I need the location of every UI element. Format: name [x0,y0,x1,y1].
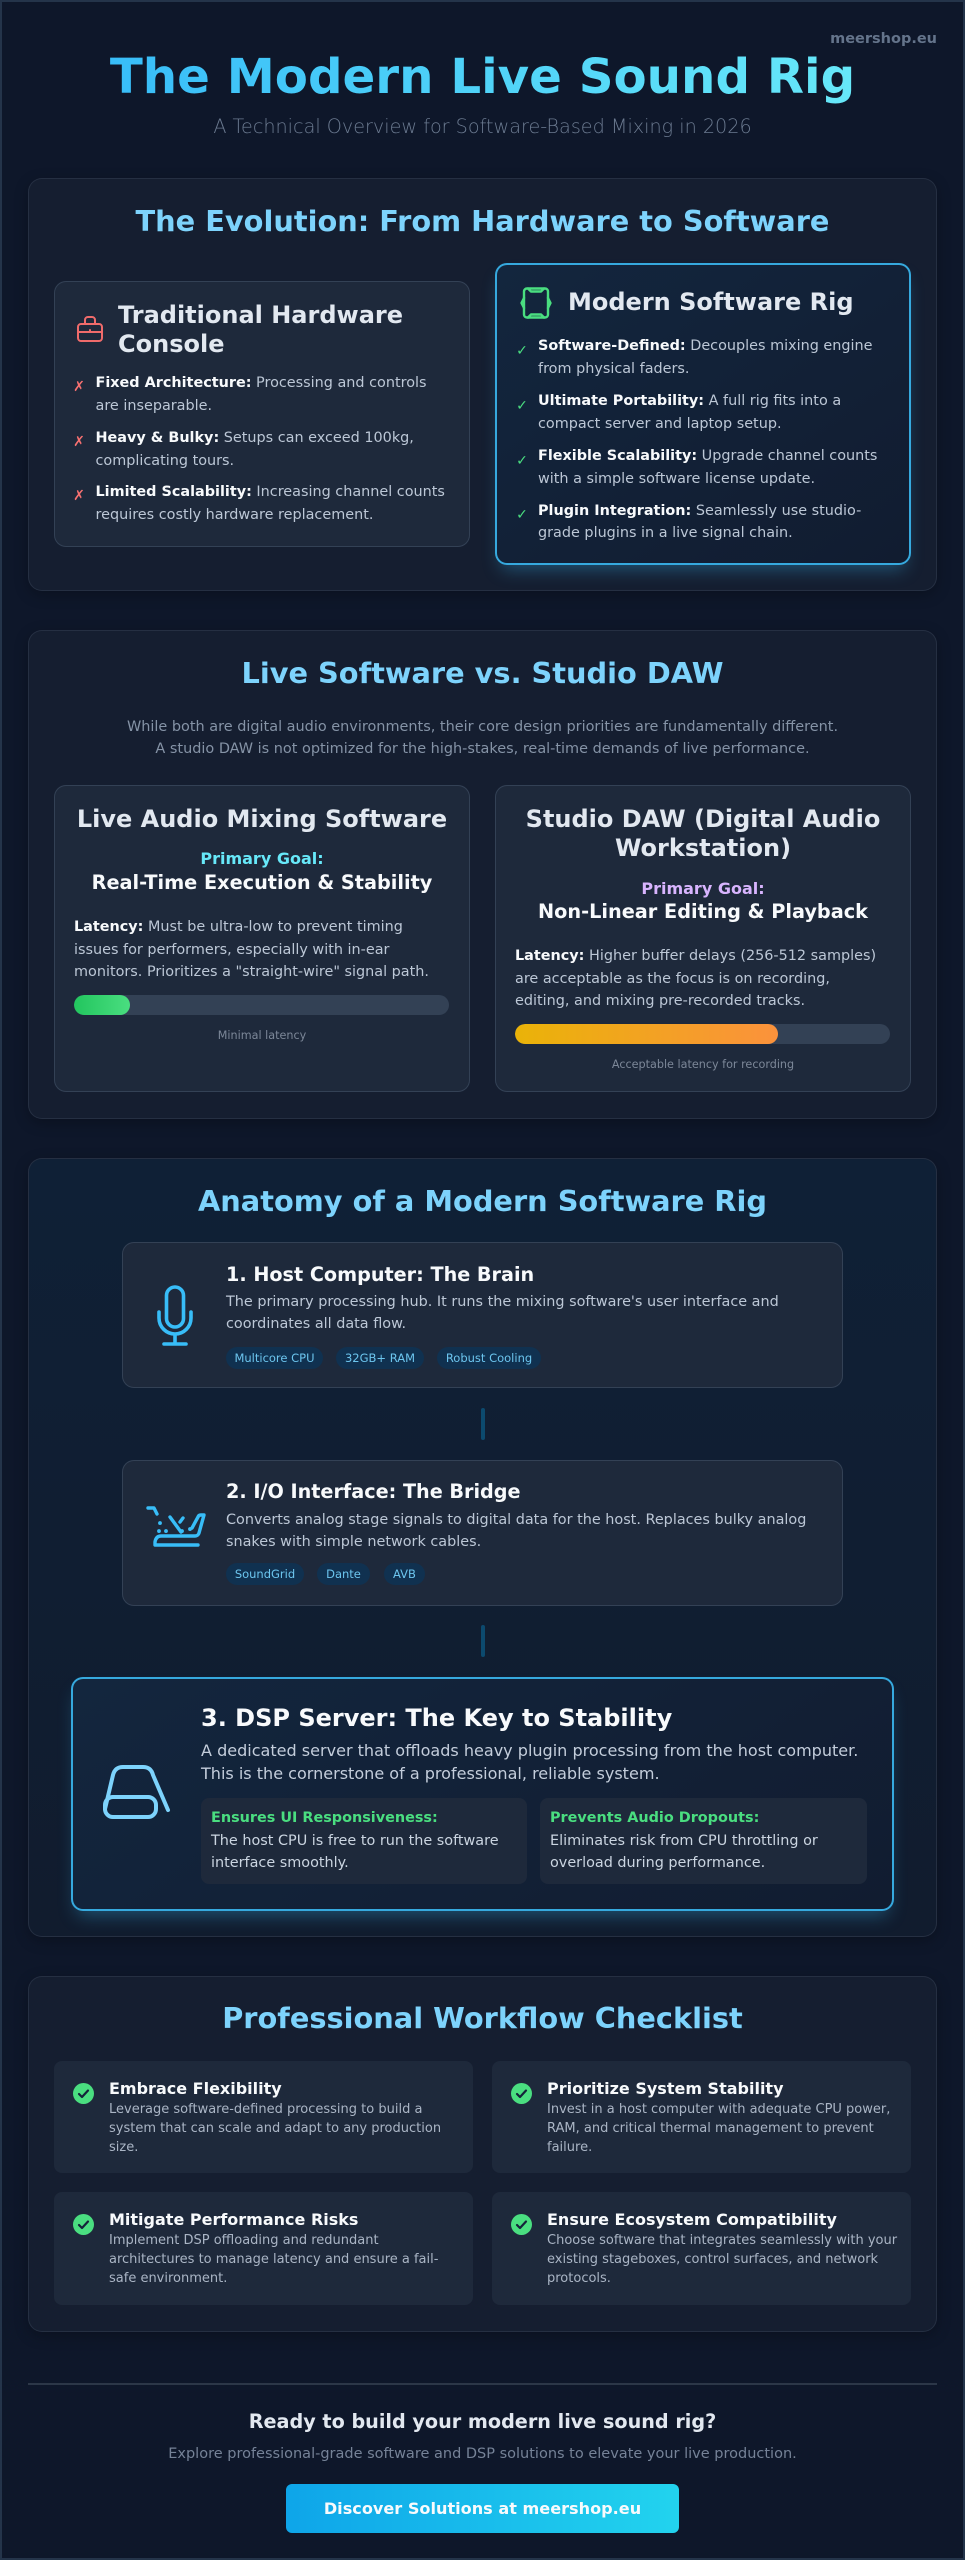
benefit: audio dropouts [540,1798,867,1884]
call to action text: Explore professional-grade software and DSP solutions to elevate your live production. [168,2446,797,2462]
latency text: are acceptable as the focus is on recording, [515,971,830,987]
primary goal label: Primary Goal: [200,849,324,868]
item text: architectures to manage latency and ensure a fail- [109,2252,438,2267]
list item: grade plugins in a live signal chain. [538,525,793,541]
card heading: Modern Software Rig [568,288,854,316]
latency text [74,919,429,980]
icon: chip [520,287,552,319]
icon: microphone [157,1285,193,1346]
tag: Dante [326,1567,361,1581]
step text: A dedicated server that offloads heavy plugin processing from the host computer. [201,1741,858,1760]
item text: Implement DSP offloading and redundant [109,2232,379,2248]
card heading: Workstation) [615,834,791,862]
step text: Converts analog stage signals to digital data for the host. Replaces bulky analog [226,1512,806,1528]
card: live audio mixing software [54,785,470,1092]
tag [226,1347,323,1369]
bar caption: Acceptable latency for recording [612,1058,794,1071]
benefit text [550,1810,818,1871]
list item: Ultimate Portability: A full rig fits into a [538,393,841,409]
brand label: meershop.eu [830,31,937,47]
list item [538,393,841,432]
mark: ✗ [73,434,85,450]
primary goal: Real-Time Execution & Stability [92,871,432,894]
heading: checklist: Professional Workflow Checklist [222,2001,743,2035]
mark: ✗ [73,379,85,395]
icon: check [511,2214,532,2235]
list item [538,448,877,487]
list item: Software-Defined: Decouples mixing engine [538,338,873,354]
card heading [118,301,403,358]
step title: 1. Host Computer: The Brain [226,1263,534,1286]
title: The Modern Live Sound Rig [110,49,855,105]
heading: live vs daw: Live Software vs. Studio DAW [242,656,724,690]
tag: SoundGrid [235,1567,295,1581]
benefit: ui responsiveness [201,1798,527,1884]
tag: AVB [393,1567,416,1581]
card: traditional hardware console [54,281,470,547]
mark: ✓ [516,398,528,414]
item text: Choose software that integrates seamlessly with your [547,2232,897,2248]
tag [226,1563,304,1585]
list item [96,430,414,469]
list item: requires costly hardware replacement. [96,507,373,523]
card: studio daw [495,785,911,1092]
item title: Mitigate Performance Risks [109,2210,358,2229]
heading: anatomy: Anatomy of a Modern Software Rig [198,1184,767,1218]
list item [96,484,445,523]
item text: Leverage software-defined processing to build a [109,2102,422,2116]
tag [437,1347,541,1369]
benefit text: Prevents Audio Dropouts: [550,1810,759,1826]
list item: from physical faders. [538,361,690,377]
benefit text: Eliminates risk from CPU throttling or [550,1833,818,1849]
mark: ✓ [516,453,528,469]
mark: ✓ [516,343,528,359]
list item [96,375,426,414]
latency text: issues for performers, especially with in-ear [74,942,389,958]
bar caption: Minimal latency [218,1029,306,1042]
list item: complicating tours. [96,453,234,469]
benefit text: Ensures UI Responsiveness: [211,1810,438,1826]
step title: 2. I/O Interface: The Bridge [226,1480,521,1503]
intro text: While both are digital audio environments, their core design priorities are fundamentally different. [127,719,838,735]
step text: snakes with simple network cables. [226,1534,481,1550]
tag [384,1563,425,1585]
latency text: monitors. Prioritizes a "straight-wire" signal path. [74,964,429,980]
item text: failure. [547,2140,592,2155]
primary goal label: Primary Goal: [641,879,765,898]
item text: system that can scale and adapt to any production [109,2121,441,2136]
latency text: Latency: Higher buffer delays (256-512 samples) [515,948,876,964]
panel: checklist [28,1976,937,2332]
connector [480,1408,484,1440]
call to action heading: Ready to build your modern live sound rig? [249,2410,716,2433]
step 3: dsp server [71,1677,894,1911]
list item: with a simple software license update. [538,471,815,487]
primary goal: Non-Linear Editing & Playback [538,900,868,923]
benefit text [210,1810,499,1871]
heading: evolution: The Evolution: From Hardware to Software [136,204,829,238]
item text: Invest in a host computer with adequate CPU power, [547,2102,890,2116]
item title: Ensure Ecosystem Compatibility [547,2210,837,2229]
icon: check [73,2083,94,2104]
latency text: editing, and mixing pre-recorded tracks. [515,993,805,1009]
card heading [526,805,880,862]
tag: Robust Cooling [446,1351,532,1365]
mark: ✓ [516,507,528,523]
item title: Prioritize System Stability [547,2079,784,2098]
step 1: host computer [122,1242,843,1388]
list item [538,502,861,541]
list item: compact server and laptop setup. [538,416,782,432]
step text [226,1294,779,1332]
checklist item [492,2061,911,2173]
latency bar [515,1024,890,1044]
item text [109,2232,438,2286]
checklist item [492,2192,911,2305]
card: modern software rig [495,263,911,565]
item text: protocols. [547,2271,611,2286]
step text: coordinates all data flow. [226,1316,406,1332]
subtitle: A Technical Overview for Software-Based Mixing in 2026 [213,115,752,138]
icon: briefcase [77,316,103,342]
list item: are inseparable. [96,398,212,414]
list item: Fixed Architecture: Processing and controls [96,375,426,391]
item text [547,2232,898,2286]
latency bar [74,995,449,1015]
benefit text: interface smoothly. [211,1855,349,1871]
checklist item [54,2192,473,2305]
panel: live vs daw [28,630,937,1119]
step text [226,1512,806,1550]
step text: This is the cornerstone of a professional, reliable system. [201,1764,660,1783]
list item: Flexible Scalability: Upgrade channel counts [538,448,877,464]
icon: check [511,2083,532,2104]
item text: existing stageboxes, control surfaces, and network [547,2252,878,2267]
item text [109,2102,441,2155]
list item: Limited Scalability: Increasing channel counts [96,484,445,500]
item text [547,2102,890,2155]
list item [538,338,873,377]
benefit text: overload during performance. [550,1855,765,1871]
item title: Embrace Flexibility [109,2079,282,2098]
item text: safe environment. [109,2271,227,2286]
benefit text: The host CPU is free to run the software [211,1833,499,1849]
intro text [127,719,838,757]
step 2: io interface [122,1460,843,1606]
call to action button [286,2484,679,2533]
tag: 32GB+ RAM [345,1351,415,1365]
connector [480,1625,484,1657]
item text: RAM, and critical thermal management to prevent [547,2121,874,2136]
latency text: Latency: Must be ultra-low to prevent timing [74,919,403,935]
icon: server [103,1765,170,1819]
panel: evolution [28,178,937,591]
panel: anatomy [28,1158,937,1937]
step text: The primary processing hub. It runs the mixing software's user interface and [226,1294,779,1310]
tag [317,1563,370,1585]
list item: Heavy & Bulky: Setups can exceed 100kg, [96,430,414,446]
item text: size. [109,2140,138,2155]
tag [336,1347,424,1369]
step text [200,1741,858,1783]
tag: Multicore CPU [234,1351,315,1365]
card heading: Studio DAW (Digital Audio [526,805,880,833]
latency text [515,948,876,1009]
call to action button: Discover Solutions at meershop.eu [324,2499,641,2518]
list item: Plugin Integration: Seamlessly use studio- [538,502,861,518]
card heading: Live Audio Mixing Software [77,805,447,833]
card heading: Traditional Hardware [118,301,403,329]
mark: ✗ [73,488,85,504]
intro text: A studio DAW is not optimized for the high-stakes, real-time demands of live performance. [155,741,810,757]
icon: check [73,2214,94,2235]
checklist item [54,2061,473,2173]
step title: 3. DSP Server: The Key to Stability [201,1704,672,1732]
card heading: Console [118,330,224,358]
icon: interface [146,1506,206,1547]
